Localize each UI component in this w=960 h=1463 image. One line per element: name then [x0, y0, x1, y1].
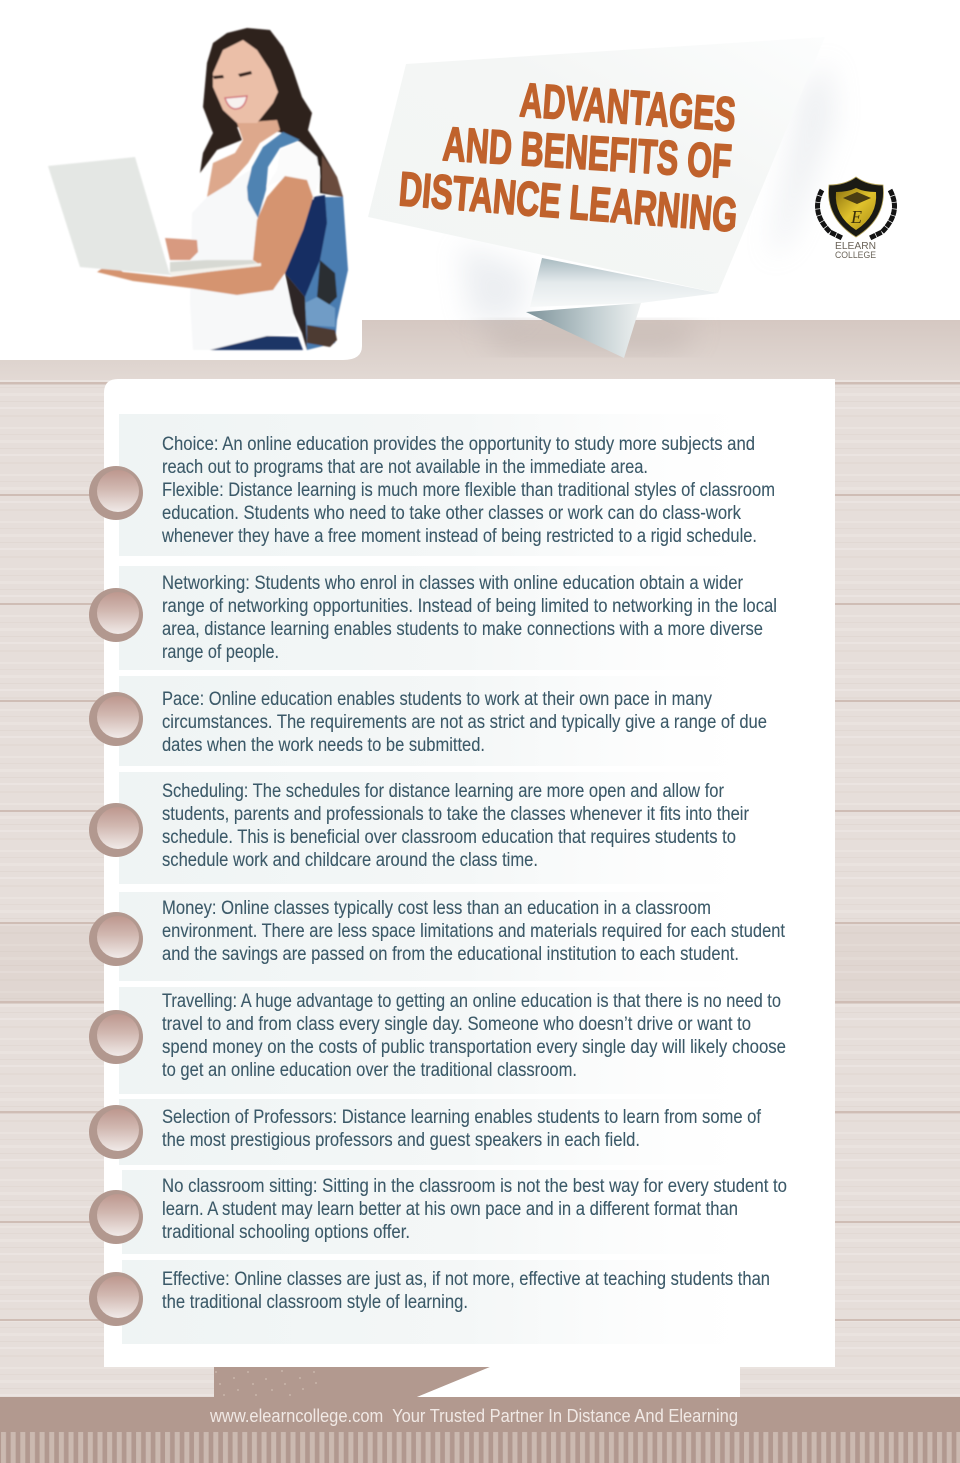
panel: travelling: spend money on the costs of public transportation every single day will likely choose: [162, 1037, 786, 1058]
panel: effective: [122, 1260, 770, 1344]
panel: effective: the traditional classroom style of learning.: [162, 1292, 468, 1313]
title: [397, 74, 739, 243]
panel: travelling: Travelling: A huge advantage to getting an online education is that there is no need to: [162, 991, 781, 1012]
panel: selection of professors: [119, 1099, 762, 1165]
shirt: [190, 170, 298, 350]
neck and chest: [207, 120, 280, 197]
ribbon folds: [526, 258, 718, 358]
wood background: [0, 320, 960, 1400]
panel: no classroom sitting: No classroom sitting: Sitting in the classroom is not the best way for every student to: [162, 1176, 787, 1197]
main white card: [104, 379, 835, 1367]
arm: [97, 176, 313, 295]
face: [213, 40, 278, 123]
panel: networking: range of networking opportunities. Instead of being limited to networking in the local: [162, 596, 777, 617]
panel: scheduling: schedule. This is beneficial over classroom education that requires students to: [162, 827, 736, 848]
footer band: [0, 1397, 960, 1433]
footer text: www.elearncollege.com Your Trusted Partner In Distance And Elearning: [209, 1406, 738, 1426]
panel: travelling: travel to and from class every single day. Someone who doesn’t drive or want to: [162, 1014, 751, 1035]
panel: choice and flexible: Choice: An online education provides the opportunity to study more subjects and: [162, 434, 755, 455]
panel: pace: Pace: Online education enables students to work at their own pace in many: [162, 689, 712, 710]
shield: [829, 177, 883, 237]
title: ADVANTAGES: [518, 74, 737, 142]
panel: scheduling: Scheduling: The schedules for distance learning are more open and allow for: [162, 781, 725, 802]
panel: selection of professors: the most prestigious professors and guest speakers in each field.: [162, 1130, 640, 1151]
logo: Elearn College: E: [850, 207, 862, 227]
title: DISTANCE LEARNING: [397, 163, 739, 243]
bottom fold tab: [214, 1367, 740, 1397]
photo: student with laptop: [48, 28, 348, 350]
white header area: [0, 0, 960, 360]
laurels: [818, 190, 842, 238]
panel: choice and flexible: whenever they have a free moment instead of being restricted to a rigid schedule.: [161, 526, 757, 547]
panel: networking: area, distance learning enables students to make connections with a more diverse: [162, 619, 763, 640]
wood shadow under fold: [480, 325, 700, 350]
banner shadow: [460, 60, 835, 320]
title banner: [368, 37, 825, 293]
logo: Elearn College: [818, 177, 894, 261]
panel: choice and flexible: education. Students who need to take other classes or work can do class-work: [162, 503, 741, 524]
panel: choice and flexible: reach out to programs that are not available in the immediate area.: [162, 457, 648, 478]
panel: travelling: [119, 987, 786, 1094]
eyes and mouth: [213, 71, 252, 79]
jeans: [210, 336, 303, 350]
panel: networking: range of people.: [162, 642, 279, 663]
hand on keyboard: [165, 238, 198, 260]
panel: scheduling: students, parents and professionals to take the classes whenever it fits into their: [162, 804, 750, 825]
panel: selection of professors: Selection of Professors: Distance learning enables students to learn from some of: [162, 1107, 762, 1128]
panel: pace: circumstances. The requirements are not as strict and typically give a range of due: [162, 712, 767, 733]
hair: [200, 28, 343, 197]
backpack: [285, 197, 348, 350]
title: AND BENEFITS OF: [441, 118, 733, 189]
panel: choice and flexible: Flexible: Distance learning is much more flexible than traditional styles of classroom: [162, 480, 775, 501]
laptop base: [170, 260, 261, 275]
logo: Elearn College: ELEARN: [835, 241, 876, 252]
panel: networking: [119, 566, 777, 670]
panel: pace: dates when the work needs to be submitted.: [162, 735, 485, 756]
panel: pace: [119, 676, 767, 766]
panel: networking: Networking: Students who enrol in classes with online education obtain a wider: [162, 573, 744, 594]
panel: scheduling: [119, 772, 750, 884]
panel: no classroom sitting: learn. A student may learn better at his own pace and in a different format than: [162, 1199, 738, 1220]
binder ring bullets: [89, 466, 143, 1326]
panel: no classroom sitting: [122, 1170, 787, 1254]
panel: no classroom sitting: traditional schooling options offer.: [162, 1222, 410, 1243]
logo: Elearn College: COLLEGE: [835, 250, 876, 261]
strap: [247, 132, 300, 218]
panel: scheduling: schedule work and childcare around the class time.: [162, 850, 538, 871]
laptop lid: [48, 157, 170, 275]
graduation cap: [843, 192, 871, 204]
panel: effective: Effective: Online classes are just as, if not more, effective at teaching students than: [162, 1269, 770, 1290]
sleeve: [266, 142, 320, 200]
panel: money: [119, 892, 786, 981]
panel: money: Money: Online classes typically cost less than an education in a classroom: [162, 898, 711, 919]
panel: money: and the savings are passed on from the educational institution to each student.: [162, 944, 739, 965]
footer stripes: [0, 1432, 960, 1463]
panel: choice and flexible: [119, 414, 775, 556]
panel: travelling: to get an online education over the traditional classroom.: [162, 1060, 577, 1081]
panel: money: environment. There are less space limitations and materials required for each student: [162, 921, 786, 942]
